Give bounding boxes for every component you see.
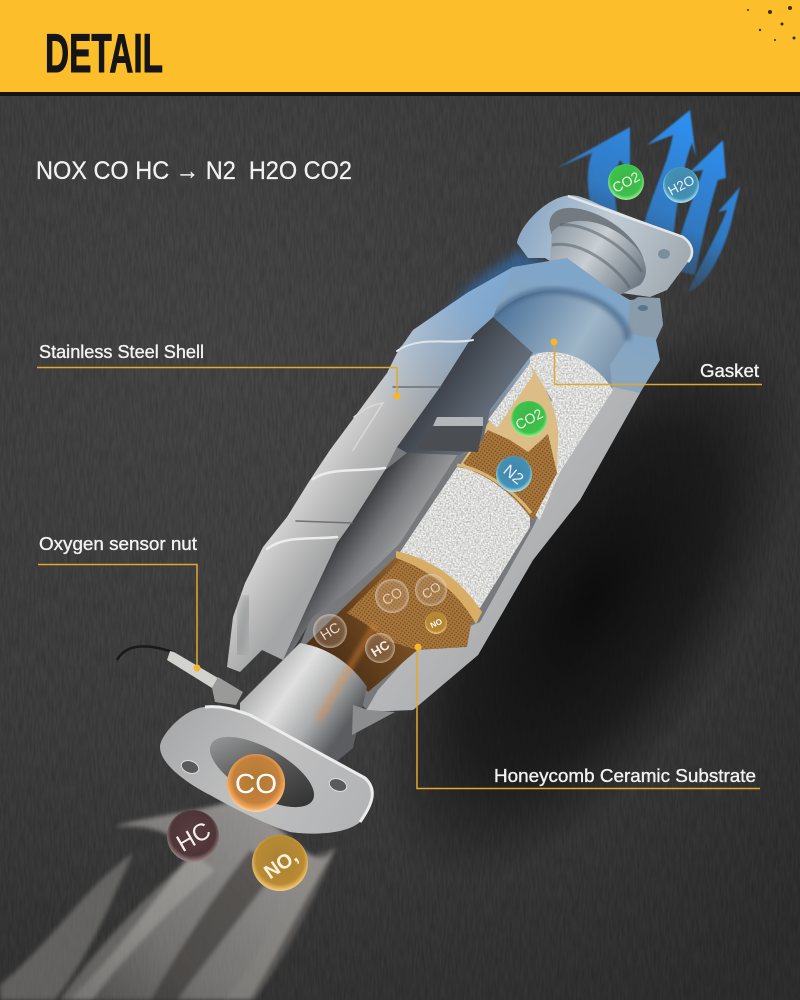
header bar [0, 0, 800, 96]
bubble: CO2 interior: CO2 [513, 405, 546, 433]
lower cut interior [300, 553, 480, 692]
dark band upper [397, 317, 533, 455]
shell body top [300, 258, 663, 710]
outlet neck [550, 221, 646, 300]
outlet flange [517, 195, 692, 297]
outer left shell half [227, 267, 513, 672]
bubble: N2 interior [496, 456, 532, 492]
callout: honeycomb ceramic substrate: Honeycomb Ceramic Substrate [494, 766, 756, 786]
bubble: CO inlet: CO [235, 768, 277, 799]
callout: stainless steel shell: Stainless Steel Shell [39, 342, 204, 362]
cavity arch shading [493, 291, 628, 340]
bubble: HC inlet [167, 810, 219, 862]
catalytic converter [117, 193, 692, 834]
callout: stainless steel shell [37, 342, 400, 400]
inner weld [352, 705, 395, 735]
left bolt hole [179, 758, 201, 776]
callout: honeycomb ceramic substrate [414, 644, 760, 788]
bubble: NOx ghost: NO [429, 617, 444, 630]
bubble: H2O outlet [663, 167, 699, 203]
inner steel cap [455, 291, 628, 412]
exhaust smoke [0, 800, 337, 1000]
right shell lip [352, 387, 640, 735]
callout: gasket [550, 338, 762, 384]
band dark lower strip [415, 426, 483, 452]
lower ceramic mat [400, 467, 530, 608]
bubble: CO2 outlet: CO2 [610, 168, 643, 196]
band highlight ridge [433, 417, 483, 426]
bubble: HC ghost: HC [317, 619, 343, 643]
callout: gasket: Gasket [700, 361, 759, 381]
lower mat top gold edge [457, 465, 531, 513]
lower honeycomb [347, 560, 473, 650]
reaction formula: NOX CO HC → N2 H2O CO2 [36, 157, 352, 185]
inlet bore [200, 723, 324, 821]
shell mounting bracket [627, 297, 663, 338]
upper ceramic mat [520, 352, 613, 520]
bubble: NOx ghost [425, 612, 447, 634]
shell ridges [238, 340, 473, 650]
bubble: H2O outlet: H2O [665, 172, 697, 199]
flange bolt [658, 249, 670, 259]
blue tint on shell top [350, 267, 513, 447]
flange edge highlight [205, 707, 372, 822]
gold substrate upper [460, 366, 558, 520]
outlet neck rings [552, 225, 642, 288]
title: DETAIL [45, 22, 163, 84]
bracket hole [638, 305, 648, 311]
blue outlet arrows [557, 110, 740, 292]
bubble: N2 interior: N2 [500, 462, 526, 488]
bubble: HC inlet: HC [172, 817, 216, 858]
bubble: CO ghost 1: CO [379, 584, 405, 608]
orange flow streak [318, 625, 375, 720]
oxygen sensor body [167, 651, 218, 688]
bubble: HC ghost 2: HC [368, 637, 393, 660]
dark band lower [283, 453, 457, 660]
bubble: HC ghost [313, 614, 347, 648]
bubble: CO ghost 1 [375, 579, 409, 613]
blue glow behind shell top [440, 250, 570, 340]
callout: oxygen sensor nut [38, 534, 200, 672]
oxygen sensor nut [212, 677, 243, 705]
bubble: CO ghost 2: CO [419, 579, 444, 602]
gold ring [396, 551, 482, 624]
right bolt hole [327, 776, 349, 794]
inlet flange [160, 707, 372, 834]
bubble: NOx inlet [252, 835, 308, 891]
outlet bore recess [537, 193, 657, 297]
inlet pipe [240, 643, 367, 775]
bubble: HC ghost 2 [365, 633, 395, 663]
callout: oxygen sensor nut: Oxygen sensor nut [39, 534, 197, 554]
bubble: CO ghost 2 [415, 574, 447, 606]
upper mat strip [488, 363, 533, 428]
bubble: NOx inlet: NO, [260, 845, 302, 884]
oxygen sensor wire [117, 646, 175, 660]
outlet flange bevel [568, 196, 692, 262]
bubble: CO inlet [227, 754, 285, 812]
upper honeycomb [463, 430, 557, 520]
